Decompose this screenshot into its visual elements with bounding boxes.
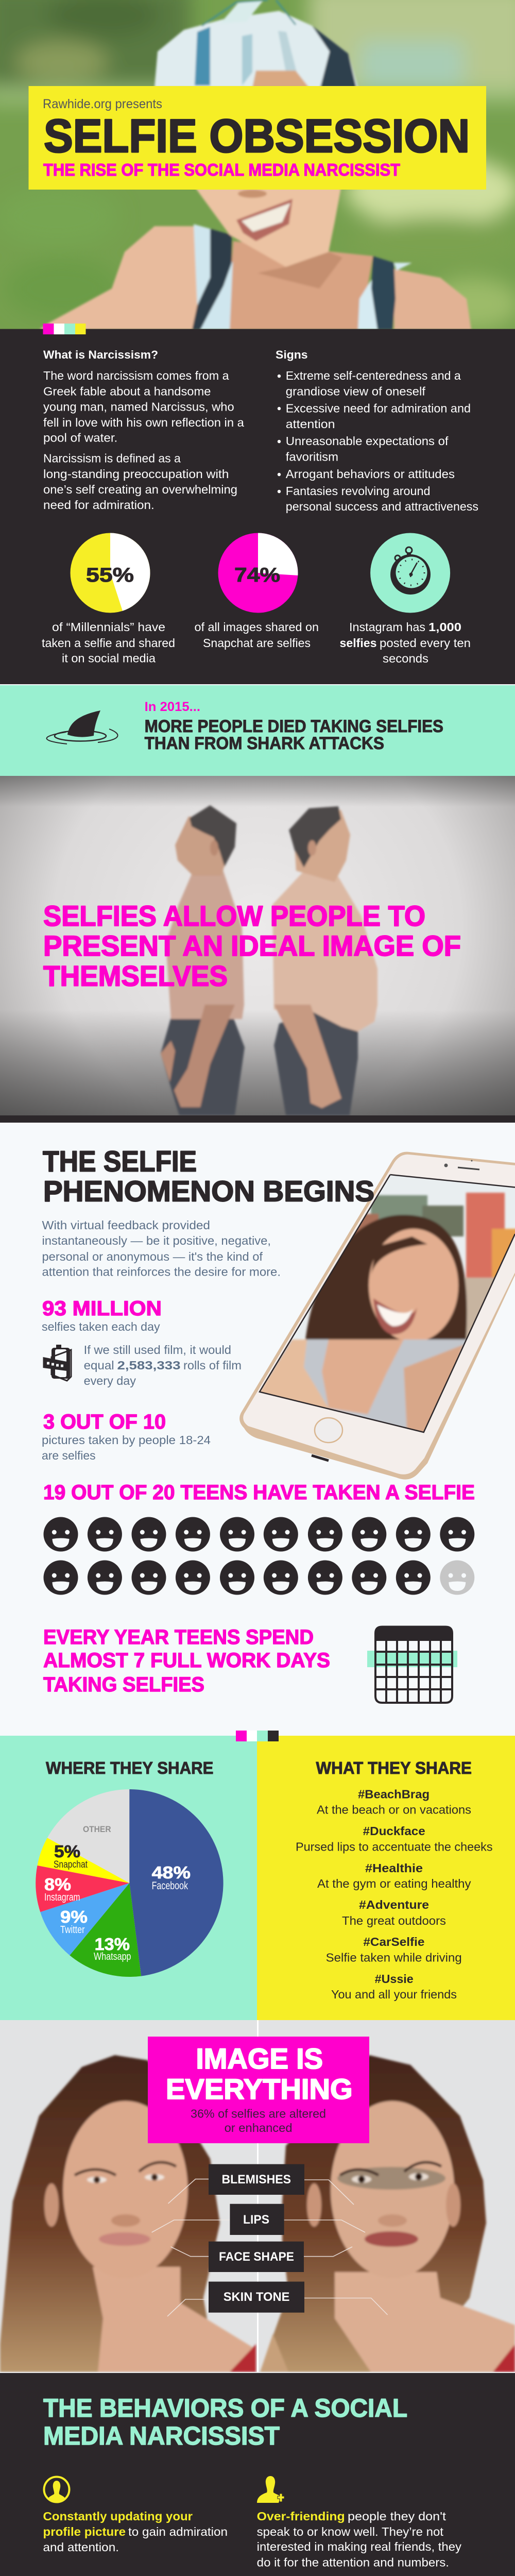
captions under stats: 1,000 (428, 620, 461, 634)
captions under stats: Snapchat are selfies (203, 636, 311, 650)
heading: WHAT THEY SHARE (316, 1758, 472, 1777)
stat text: 36% of selfies are altered (191, 2107, 326, 2121)
list: hashtags: At the gym or eating healthy (317, 1877, 471, 1890)
text: over-friending behavior (257, 2510, 462, 2569)
heading: WHERE THEY SHARE (46, 1758, 213, 1777)
list: hashtags: #CarSelfie (363, 1935, 424, 1948)
heading: selfie phenomenon: PHENOMENON BEGINS (43, 1175, 374, 1208)
text: film comparison: rolls of film (183, 1359, 242, 1372)
text: definition: young man, named Narcissus, who (43, 400, 234, 414)
panel: behaviors of a social media narcissist (0, 2373, 515, 2576)
captions under stats: of all images shared on (195, 620, 319, 634)
text: film comparison: every day (84, 1374, 136, 1387)
list: hashtags: The great outdoors (342, 1914, 446, 1927)
sunglasses (220, 0, 264, 23)
list: hashtags: #Adventure (359, 1898, 429, 1911)
text: over-friending behavior: speak to or know well. They’re not (257, 2525, 444, 2538)
icon: profile picture (44, 2477, 69, 2502)
heading: work days (43, 1626, 330, 1696)
chart: share pie: OTHER (83, 1824, 111, 1834)
panel: behaviors of a social media narcissist: MEDIA NARCISSIST (43, 2421, 280, 2450)
stat: 3 out of 10: 3 OUT OF 10 (43, 1411, 166, 1433)
chart: 55 percent pie (70, 533, 150, 613)
headline over photo: PRESENT AN IDEAL IMAGE OF (43, 929, 461, 962)
stat: 93 million: selfies taken each day (42, 1320, 160, 1333)
label: skin tone (209, 2282, 304, 2313)
text: definition: Greek fable about a handsome (43, 384, 211, 398)
text: over-friending behavior: Over-friending (257, 2510, 345, 2523)
list: signs: Arrogant behaviors or attitudes (286, 467, 455, 481)
icon: phone with selfie (232, 1152, 515, 1480)
list: signs: attention (286, 417, 335, 431)
captions under stats: posted every ten (380, 636, 471, 650)
label: lips: LIPS (243, 2213, 269, 2227)
right shoulder (394, 269, 471, 330)
heading: work days: ALMOST 7 FULL WORK DAYS (43, 1649, 330, 1672)
label: face shape (209, 2242, 304, 2272)
list: hashtags: #Duckface (363, 1824, 425, 1838)
list: hashtags (296, 1788, 493, 2001)
text: definition: one’s self creating an overwhelming (43, 483, 237, 496)
color stripes (43, 324, 85, 334)
text: definition: need for admiration. (43, 498, 154, 512)
list: signs (278, 369, 478, 513)
chart: share pie: 48% (152, 1863, 191, 1882)
heading: 19 out of 20: 19 OUT OF 20 TEENS HAVE TAKEN A SELFIE (43, 1481, 475, 1504)
chart: share pie: 8% (44, 1875, 71, 1894)
chart: share pie: Whatsapp (94, 1951, 131, 1962)
callout text: MORE PEOPLE DIED TAKING SELFIES (145, 717, 443, 736)
captions under stats: it on social media (62, 652, 156, 665)
icon: stopwatch on mint circle (370, 533, 450, 613)
headline over photo: SELFIES ALLOW PEOPLE TO (43, 900, 425, 932)
text: film comparison: equal (84, 1359, 114, 1372)
text: profile picture behavior (43, 2510, 228, 2554)
captions under stats (42, 620, 471, 665)
list: signs: Unreasonable expectations of (286, 434, 449, 448)
heading: signs: Signs (276, 348, 308, 361)
chart: share pie: Snapchat (54, 1859, 88, 1870)
text: phenomenon paragraph: With virtual feedback provided (42, 1218, 210, 1232)
label: lips (230, 2204, 284, 2235)
list: signs: Excessive need for admiration and (286, 402, 471, 415)
list: hashtags: At the beach or on vacations (317, 1803, 471, 1817)
captions under stats: of “Millennials” have (52, 620, 165, 634)
text: film comparison: If we still used film, it would (84, 1343, 231, 1357)
text: definition: Narcissism is defined as a (43, 451, 181, 465)
list: hashtags: Pursed lips to accentuate the cheeks (296, 1840, 493, 1854)
captions under stats: seconds (383, 652, 428, 665)
chart: 74 percent pie: 74% (234, 564, 280, 586)
captions under stats: selfies (340, 636, 377, 650)
chart: share pie: 5% (54, 1842, 80, 1861)
main title: SELFIE OBSESSION (44, 110, 470, 162)
text: phenomenon paragraph: attention that reinforces the desire for more. (42, 1265, 281, 1279)
text: definition (43, 369, 244, 512)
left arm (39, 226, 210, 330)
photo: two men back to back (0, 776, 515, 1115)
chart: 74 percent pie (218, 533, 298, 613)
center divider (257, 2020, 259, 2372)
stat: 3 out of 10: are selfies (42, 1449, 96, 1462)
text: definition: long-standing preoccupation with (43, 467, 229, 481)
list: signs: Fantasies revolving around (286, 484, 431, 498)
heading: selfie phenomenon: THE SELFIE (43, 1145, 197, 1178)
heading: work days: EVERY YEAR TEENS SPEND (43, 1626, 314, 1649)
callout text: THAN FROM SHARK ATTACKS (145, 734, 384, 753)
text: film comparison (84, 1343, 242, 1387)
text: over-friending behavior: interested in making real friends, they (257, 2540, 462, 2553)
headline over photo: THEMSELVES (43, 959, 228, 992)
panel: narcissism definition (0, 324, 515, 684)
label: blemishes (209, 2164, 304, 2195)
list: signs: Extreme self-centeredness and a (286, 369, 461, 382)
chart: share pie: 9% (60, 1907, 88, 1926)
chart: share pie: 13% (95, 1935, 130, 1954)
text: phenomenon paragraph (42, 1218, 281, 1279)
panel: shark fact band (0, 685, 515, 776)
list: signs: favoritism (286, 450, 338, 464)
chart: 55 percent pie: 55% (86, 564, 134, 586)
hero photo: selfie woman (0, 0, 515, 329)
heading: IMAGE IS (196, 2042, 323, 2075)
panel: image is everything: EVERYTHING (166, 2073, 353, 2105)
heading: what is narcissism: What is Narcissism? (43, 348, 158, 361)
captions under stats: Instagram has (349, 620, 425, 634)
chest (227, 241, 373, 330)
captions under stats: taken a selfie and shared (42, 636, 175, 650)
text: profile picture behavior: profile picture (43, 2525, 126, 2538)
icon: add friend (257, 2476, 284, 2503)
panel: hero title block (29, 86, 486, 190)
photo: before and after retouched faces (0, 2020, 515, 2372)
list: hashtags: #Ussie (375, 1972, 414, 1986)
text: definition: pool of water. (43, 431, 117, 444)
list: hashtags: #BeachBrag (358, 1788, 430, 1801)
text: film comparison: 2,583,333 (117, 1359, 180, 1372)
subtitle: THE RISE OF THE SOCIAL MEDIA NARCISSIST (43, 160, 400, 179)
heading: selfie phenomenon (43, 1145, 374, 1208)
list: hashtags: Selfie taken while driving (326, 1951, 462, 1964)
chart: share pie: Twitter (60, 1924, 85, 1936)
stat: 3 out of 10: pictures taken by people 18-24 (42, 1433, 211, 1447)
icon: shark fin (47, 710, 118, 744)
chart: share pie: Instagram (44, 1892, 80, 1903)
tank and straps (194, 224, 233, 330)
headline over photo (43, 900, 461, 992)
left woman (0, 2055, 220, 2372)
hair (154, 11, 358, 88)
icon: calendar (367, 1626, 457, 1703)
text: over-friending behavior: do it for the attention and numbers. (257, 2556, 449, 2569)
text: profile picture behavior: Constantly updating your (43, 2510, 193, 2523)
heading: work days: TAKING SELFIES (43, 1673, 204, 1696)
text: over-friending behavior: people they don't (348, 2510, 447, 2523)
divider bar (0, 1115, 515, 1123)
face (194, 185, 341, 267)
right woman (260, 2055, 486, 2372)
text: phenomenon paragraph: personal or anonymous — it's the kind of (42, 1250, 263, 1263)
heading: THE BEHAVIORS OF A SOCIAL (43, 2394, 407, 2422)
icon grid: smiley faces (43, 1517, 474, 1595)
text: profile picture behavior: to gain admiration (128, 2525, 228, 2538)
stat: 3 out of 10 (42, 1411, 211, 1462)
panel: image is everything: or enhanced (225, 2121, 293, 2134)
label: skin tone: SKIN TONE (224, 2290, 289, 2304)
left man (161, 1018, 245, 1115)
presenter line: Rawhide.org presents (43, 97, 162, 111)
stat: 93 million (42, 1297, 162, 1333)
callout connector lines (152, 2179, 387, 2316)
right man (274, 1011, 358, 1115)
list: hashtags: You and all your friends (331, 1988, 457, 2001)
callout lead-in: In 2015... (145, 700, 200, 714)
text: definition: fell in love with his own reflection in a (43, 416, 244, 429)
callout text (145, 717, 443, 753)
panel: image is everything (148, 2037, 369, 2143)
text: definition: The word narcissism comes from a (43, 369, 229, 382)
list: hashtags: #Healthie (365, 1861, 423, 1875)
list: signs: personal success and attractiveness (286, 500, 478, 513)
list: signs: grandiose view of oneself (286, 384, 426, 398)
label: blemishes: BLEMISHES (221, 2173, 291, 2187)
chart: share pie (36, 1789, 224, 1977)
text: phenomenon paragraph: instantaneously — be it positive, negative, (42, 1234, 271, 1247)
panel: where they share (0, 1736, 257, 2020)
text: profile picture behavior: and attention. (43, 2540, 119, 2554)
color stripes between panels (236, 1731, 279, 1741)
panel: what they share (257, 1736, 515, 2020)
chart: share pie: Facebook (152, 1880, 188, 1892)
icon: film roll (43, 1345, 71, 1381)
stat: 93 million: 93 MILLION (42, 1297, 162, 1320)
label: face shape: FACE SHAPE (219, 2250, 294, 2264)
